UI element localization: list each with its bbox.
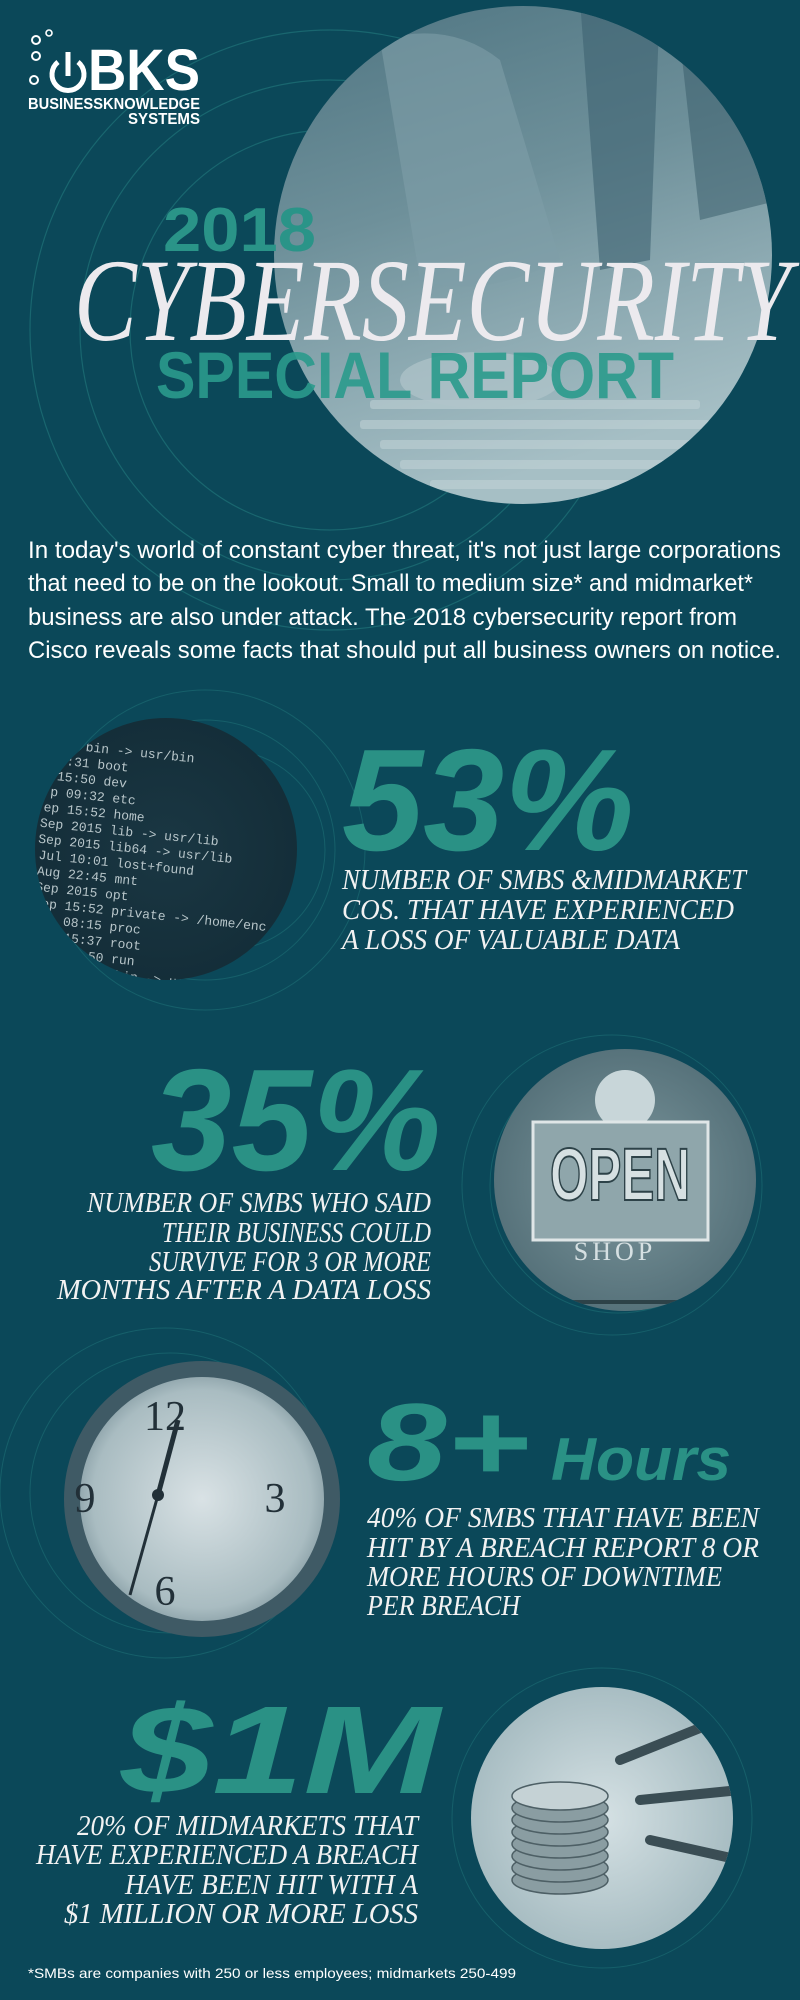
intro paragraph: business are also under attack. The 2018 cybersecurity report from xyxy=(28,604,737,631)
stat 2: 35%: 35% xyxy=(151,1039,441,1201)
intro paragraph: In today's world of constant cyber threat, it's not just large corporations xyxy=(28,537,781,564)
photo: terminal: 15:50 dev xyxy=(56,769,128,792)
photo: open sign: SHOP xyxy=(574,1237,656,1266)
photo: terminal: 9:31 boot xyxy=(58,753,129,776)
photo: terminal: Sep 2015 opt xyxy=(35,880,129,904)
photo: clock: 9 xyxy=(74,1476,96,1522)
intro paragraph: Cisco reveals some facts that should put all business owners on notice. xyxy=(28,637,781,664)
photo: terminal: Sep 15:52 private -> /home/enc xyxy=(33,896,267,935)
photo: terminal: p 09:32 etc xyxy=(50,785,136,809)
stat 3: 8+ Hours: 8+ xyxy=(367,1381,530,1504)
title: SPECIAL REPORT xyxy=(156,338,674,412)
photo: terminal: Sep 2015 sbin -> usr/bin xyxy=(36,960,224,995)
photo: clock: 3 xyxy=(264,1476,286,1522)
stat 1: 53% xyxy=(24,690,748,1010)
photo: terminal: ep 15:52 home xyxy=(43,800,145,826)
stat 3: 8+ Hours: HIT BY A BREACH REPORT 8 OR xyxy=(366,1532,759,1564)
title: 2018 xyxy=(163,196,316,265)
logo: BKS xyxy=(28,30,200,128)
photo: terminal: Sep 08:15 proc xyxy=(31,911,141,938)
stat 1: 53%: NUMBER OF SMBS &MIDMARKET xyxy=(341,864,748,896)
logo: BKS: BUSINESSKNOWLEDGE xyxy=(28,96,200,113)
stat 4: $1M: HAVE BEEN HIT WITH A xyxy=(124,1869,418,1901)
stat 2: 35%: MONTHS AFTER A DATA LOSS xyxy=(56,1274,431,1306)
stat 3: 8+ Hours: PER BREACH xyxy=(366,1590,522,1622)
stat 4: $1M xyxy=(35,1668,752,1968)
photo: clock: 6 xyxy=(154,1569,176,1615)
stat 4: $1M: HAVE EXPERIENCED A BREACH xyxy=(35,1839,420,1871)
stat 3: 8+ Hours: MORE HOURS OF DOWNTIME xyxy=(366,1561,722,1593)
footnote: *SMBs are companies with 250 or less employees; midmarkets 250-499 xyxy=(28,1965,516,1981)
photo: terminal: Aug 22:45 mnt xyxy=(36,864,139,889)
photo: terminal: 5 bin -> usr/bin xyxy=(69,738,195,766)
stat 1: 53%: 53% xyxy=(342,719,634,881)
decorative rings top xyxy=(30,30,630,630)
photo: hands on keyboard xyxy=(274,0,780,504)
photo: terminal: Sep 2015 lib -> usr/lib xyxy=(39,816,219,849)
stat 2: 35%: NUMBER OF SMBS WHO SAID xyxy=(86,1187,431,1219)
photo: terminal: Jul 10:01 lost+found xyxy=(38,848,195,879)
intro paragraph xyxy=(28,537,781,664)
photo: clock xyxy=(0,1328,332,1658)
photo: terminal xyxy=(24,690,365,1010)
logo: BKS: BKS xyxy=(88,38,200,103)
logo: BKS: SYSTEMS xyxy=(128,111,200,128)
photo: coins and pens xyxy=(452,1668,752,1968)
stat 2: 35%: THEIR BUSINESS COULD xyxy=(162,1217,431,1249)
stat 3: 8+ Hours: Hours xyxy=(551,1426,731,1493)
stat 3: 8+ Hours: 40% OF SMBS THAT HAVE BEEN xyxy=(367,1502,761,1534)
stat 4: $1M: $1M xyxy=(120,1681,444,1820)
stat 1: 53%: A LOSS OF VALUABLE DATA xyxy=(340,924,680,956)
photo: terminal: Aug 15:37 root xyxy=(31,928,142,954)
photo: terminal: Sep 2015 lib64 -> usr/lib xyxy=(38,832,233,867)
stat 4: $1M: 20% OF MIDMARKETS THAT xyxy=(77,1810,420,1842)
title xyxy=(74,196,800,412)
stat 1: 53%: COS. THAT HAVE EXPERIENCED xyxy=(342,894,734,926)
stat 4: $1M: $1 MILLION OR MORE LOSS xyxy=(64,1898,418,1930)
photo: clock: 12 xyxy=(144,1394,186,1440)
photo: open sign xyxy=(462,1035,762,1335)
stat 2: 35%: SURVIVE FOR 3 OR MORE xyxy=(149,1246,431,1278)
photo: terminal: Sep 15:50 run xyxy=(33,944,135,969)
photo: open sign: OPEN xyxy=(550,1133,690,1216)
intro paragraph: that need to be on the lookout. Small to medium size* and midmarket* xyxy=(28,570,753,597)
stat 2: 35% xyxy=(56,1035,762,1335)
stat 3: 8+ Hours xyxy=(0,1328,761,1658)
